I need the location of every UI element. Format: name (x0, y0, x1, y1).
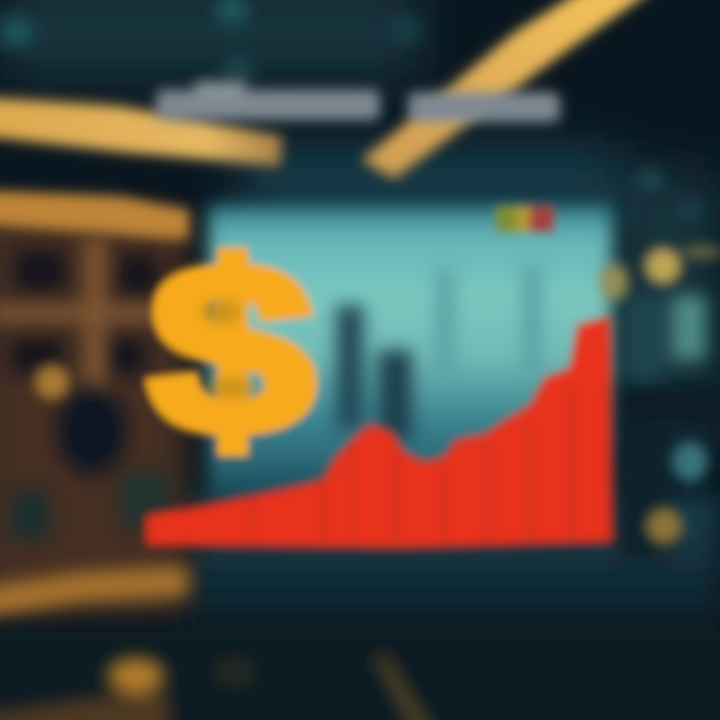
lower gold ledge (0, 566, 188, 618)
bar chart: red rising bars (146, 316, 614, 548)
ceiling lights (0, 0, 421, 82)
building top cornice (0, 190, 190, 240)
building columns (0, 238, 160, 418)
bar dividers (250, 385, 573, 543)
lower lights (0, 655, 440, 720)
lower dark area (0, 625, 720, 720)
bokeh lights (600, 168, 720, 544)
heading: blurred title (156, 82, 560, 122)
building windows (10, 250, 170, 540)
legend: coloured squares (496, 206, 554, 232)
dark figure (58, 386, 126, 474)
panel: teal chart screen (208, 205, 612, 505)
left gold beam (0, 97, 282, 166)
ceiling glow (0, 0, 720, 450)
floor (190, 495, 720, 635)
panel: left building (0, 190, 190, 618)
building body (0, 215, 186, 615)
icon: dollar sign: $ (151, 215, 313, 483)
dollar inner shading (202, 301, 254, 398)
right gold beam (362, 0, 655, 178)
amber window glow (35, 365, 69, 399)
right dark columns (618, 295, 720, 560)
skyline silhouettes (336, 265, 542, 440)
